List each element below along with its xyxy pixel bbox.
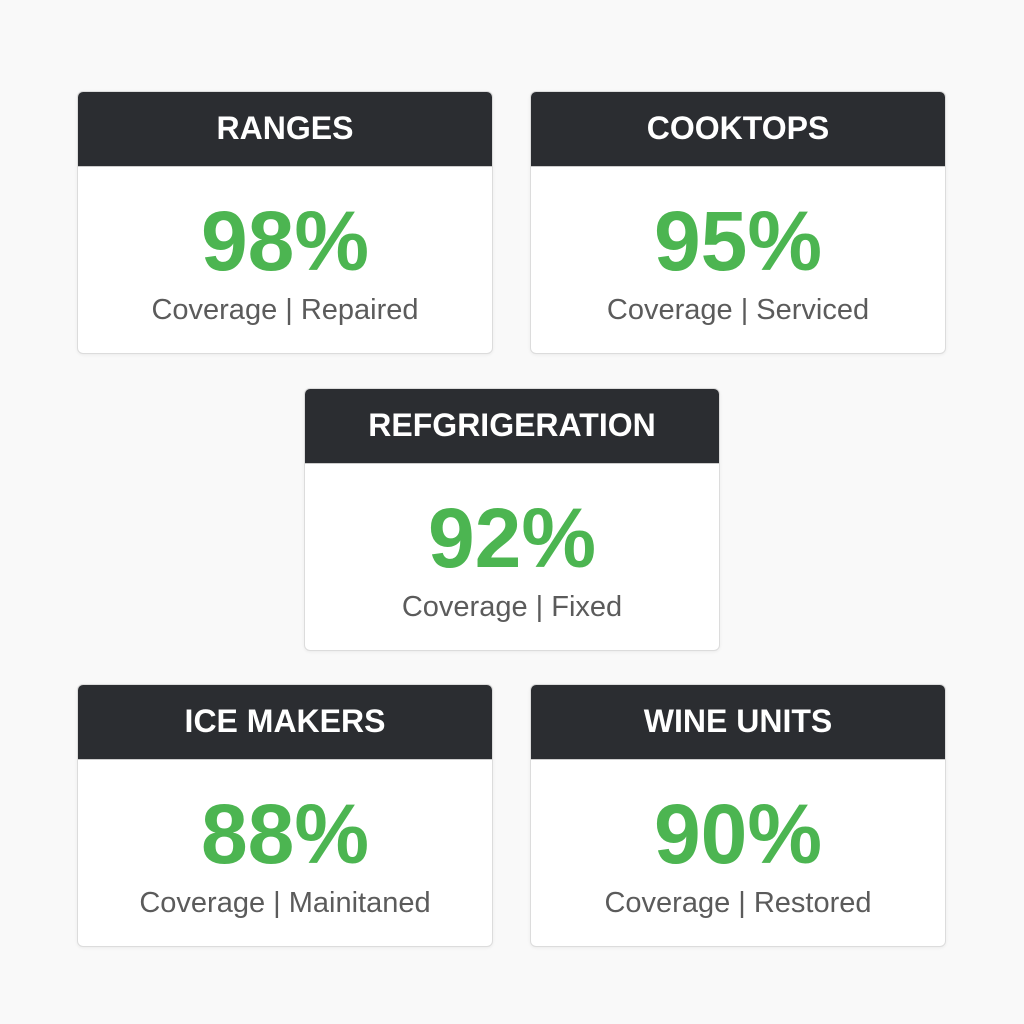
heading: cooktops: COOKTOPS [647,110,829,146]
stat: 95%: 95% [654,194,822,288]
heading: wine units [531,685,945,760]
card: ranges [77,91,493,354]
stat: 98%: 98% [201,194,369,288]
heading: ranges [78,92,492,167]
heading: ranges: RANGES [217,110,353,146]
label: Coverage | Serviced [607,294,869,326]
heading: wine units: WINE UNITS [644,703,832,739]
heading: ice makers [78,685,492,760]
card: refrigeration [304,388,720,651]
label: Coverage | Restored [604,887,872,919]
heading: ice makers: ICE MAKERS [185,703,385,739]
stat: 90%: 90% [654,787,822,881]
label: Coverage | Mainitaned [139,887,431,919]
card: ice makers [77,684,493,947]
heading: cooktops [531,92,945,167]
stat: 92%: 92% [428,491,596,585]
card: cooktops [530,91,946,354]
card: wine units [530,684,946,947]
heading: refrigeration [305,389,719,464]
stat: 88%: 88% [201,787,369,881]
label: Coverage | Repaired [151,294,419,326]
heading: refrigeration: REFGRIGERATION [368,407,656,443]
label: Coverage | Fixed [402,591,622,623]
